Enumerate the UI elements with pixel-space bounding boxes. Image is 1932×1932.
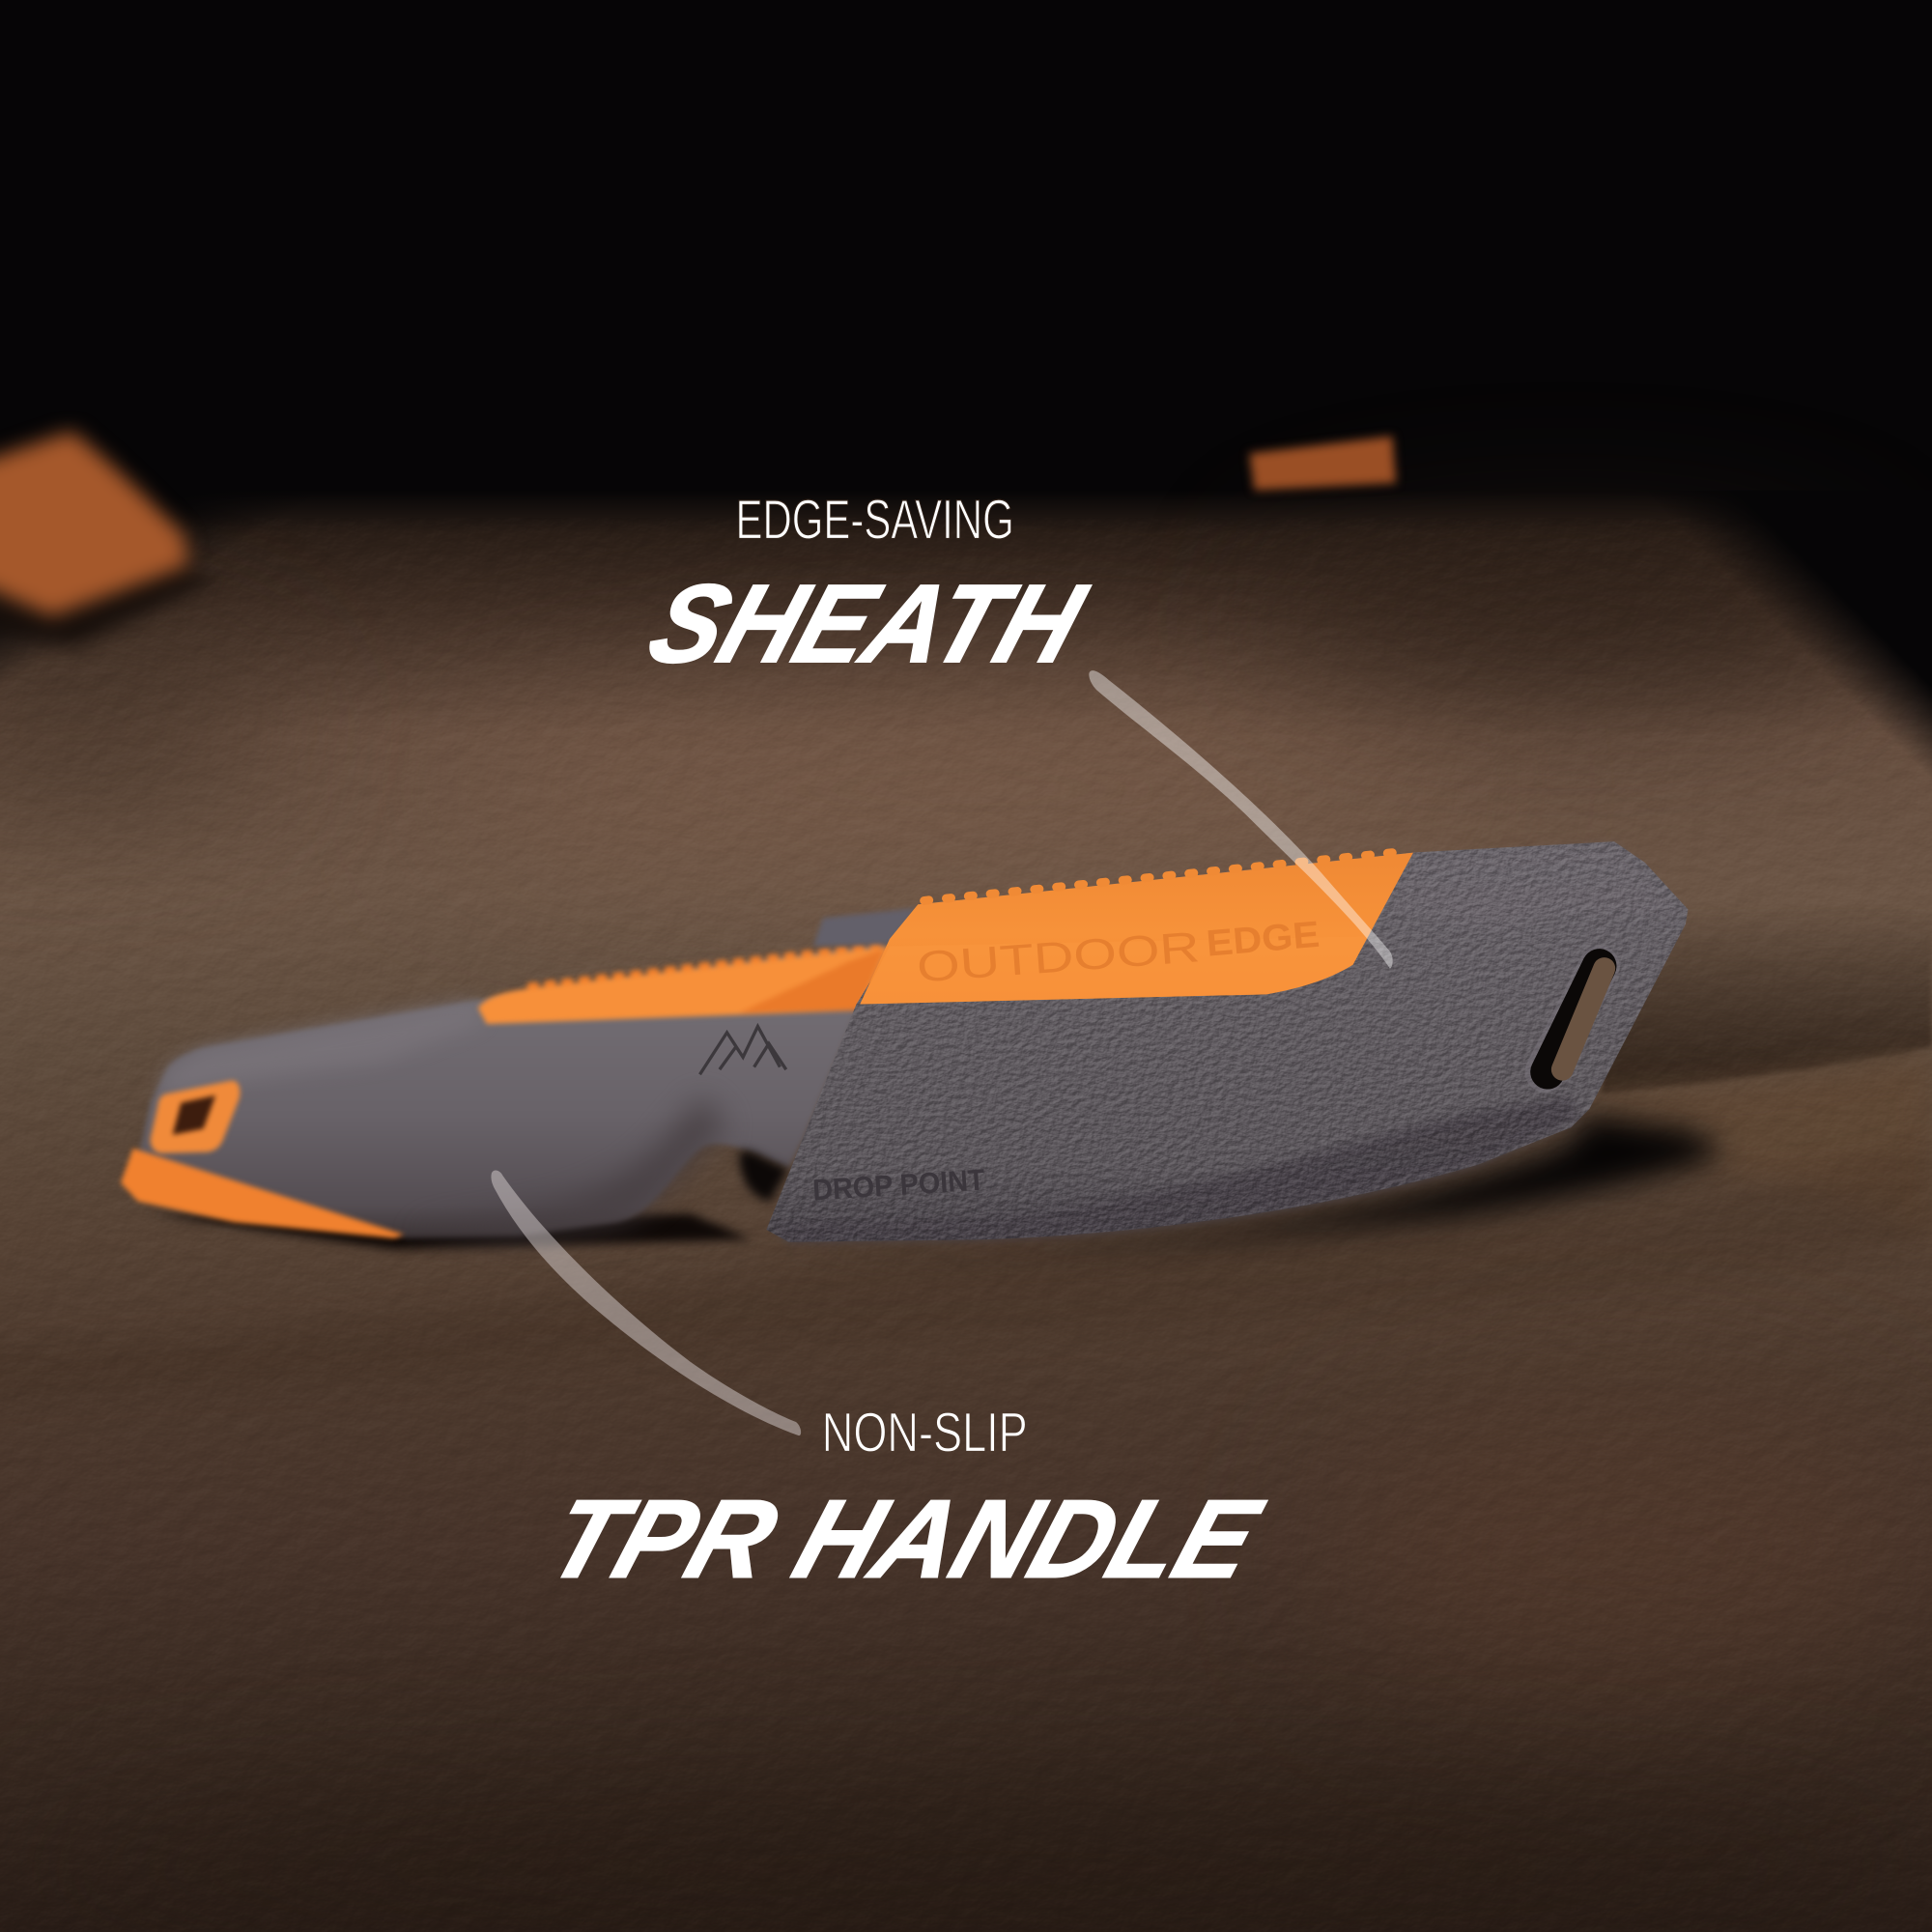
sheath serrated teeth [924, 851, 1405, 900]
sheath orange lower band [860, 936, 1368, 1005]
blade collar [813, 908, 917, 947]
cloth top right dark corner [1540, 491, 1932, 810]
cloth weave texture [0, 518, 1932, 1932]
background: blurred orange strap left [0, 431, 215, 647]
cloth top left dark corner [0, 491, 345, 699]
sheath orange panel [860, 853, 1413, 1005]
knife handle [121, 908, 917, 1238]
heading: sheath: SHEATH [636, 561, 1100, 685]
sheath bottom shadow facet [774, 1096, 1577, 1242]
sheath grey body [766, 841, 1688, 1242]
knife shadow on cloth [148, 1115, 1725, 1253]
sheath brand text: EDGE [1205, 914, 1321, 965]
heading: TPR handle: TPR HANDLE [534, 1476, 1275, 1601]
background: canvas cloth [0, 491, 1932, 1932]
leader line: sheath [1089, 670, 1393, 969]
sheath [766, 841, 1688, 1242]
label: non-slip: NON-SLIP [822, 1403, 1028, 1464]
background: blurred orange strap right [1249, 437, 1396, 491]
callout: TPR handle [534, 1403, 1275, 1601]
handle grey body [135, 944, 887, 1238]
sheath hook highlight facet [1386, 845, 1682, 930]
handle top facet [160, 1001, 483, 1096]
callout: sheath [636, 489, 1100, 685]
finger guard dark [739, 1151, 788, 1202]
sheath lanyard slot [1545, 966, 1605, 1072]
handle top orange strip [478, 944, 890, 1024]
sheath brand text [915, 914, 1321, 992]
sheath brand text: OUTDOOR [915, 923, 1202, 992]
label: edge-saving: EDGE-SAVING [735, 489, 1014, 551]
handle lower orange trim [121, 1149, 404, 1238]
sheath model text: DROP POINT [811, 1163, 986, 1207]
mountain logo [699, 1026, 786, 1074]
cloth light and shadow zones [0, 542, 1932, 1932]
handle lower shadow facet [407, 1096, 727, 1236]
lanyard loop orange [151, 1081, 240, 1153]
sheath leather texture [766, 841, 1688, 1242]
leader line: handle [491, 1171, 801, 1435]
